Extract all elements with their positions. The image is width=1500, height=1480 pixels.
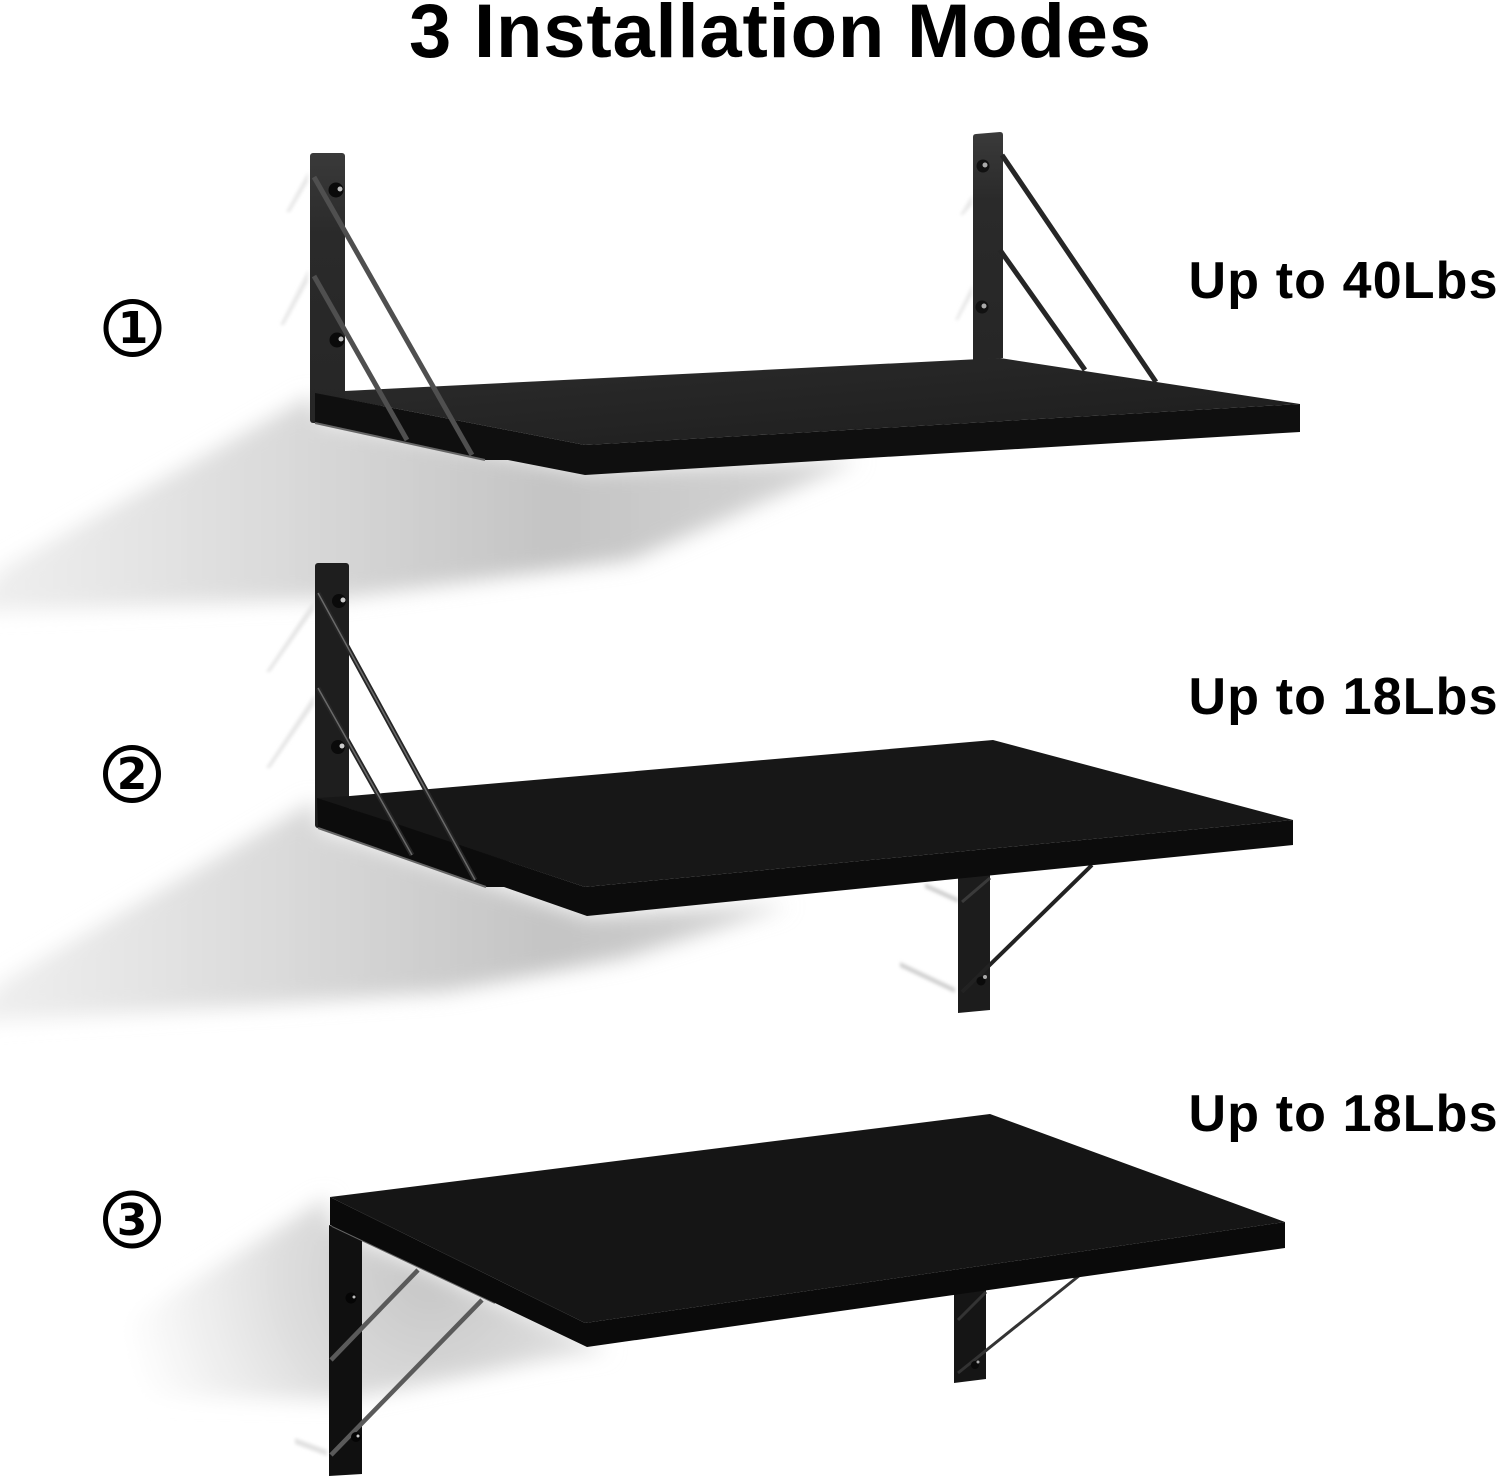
left bracket upright 2 xyxy=(315,563,349,828)
wall shadow 1 xyxy=(0,395,860,612)
label: circled number 1 xyxy=(106,302,159,354)
right bracket 1 xyxy=(973,132,1156,382)
left bracket 3 xyxy=(329,1225,495,1476)
wall shadow 2 xyxy=(0,800,790,1022)
lower right bracket 2 xyxy=(958,865,1092,1013)
panel: mode 3 shelf xyxy=(110,1114,1285,1476)
left bracket upright 1 xyxy=(310,153,345,423)
shelf board 2 xyxy=(317,740,1293,916)
capacity label 3: Up to 18Lbs xyxy=(1188,1085,1498,1143)
label: circled number 2: 2 xyxy=(117,749,147,800)
label: circled number 1: 1 xyxy=(118,303,148,354)
label: circled number 3 xyxy=(106,1193,158,1246)
shelf board 3 xyxy=(330,1114,1285,1347)
capacity label 1: Up to 40Lbs xyxy=(1188,252,1498,310)
panel: mode 1 shelf xyxy=(0,132,1300,612)
shelf board 1 xyxy=(315,358,1300,475)
label: circled number 3: 3 xyxy=(117,1195,147,1246)
strut shadows 1 xyxy=(280,172,972,325)
capacity label 2: Up to 18Lbs xyxy=(1188,668,1498,726)
lower right bracket 3 xyxy=(954,1275,1080,1383)
shadow lines of lower bracket xyxy=(266,600,958,993)
panel: mode 2 shelf xyxy=(0,563,1293,1022)
wall shadow 3 xyxy=(110,1197,610,1400)
left bracket struts 1 xyxy=(314,177,485,460)
strut shadow 3 xyxy=(295,1438,327,1456)
left bracket struts 2 xyxy=(318,593,486,887)
label: circled number 2 xyxy=(106,748,158,800)
